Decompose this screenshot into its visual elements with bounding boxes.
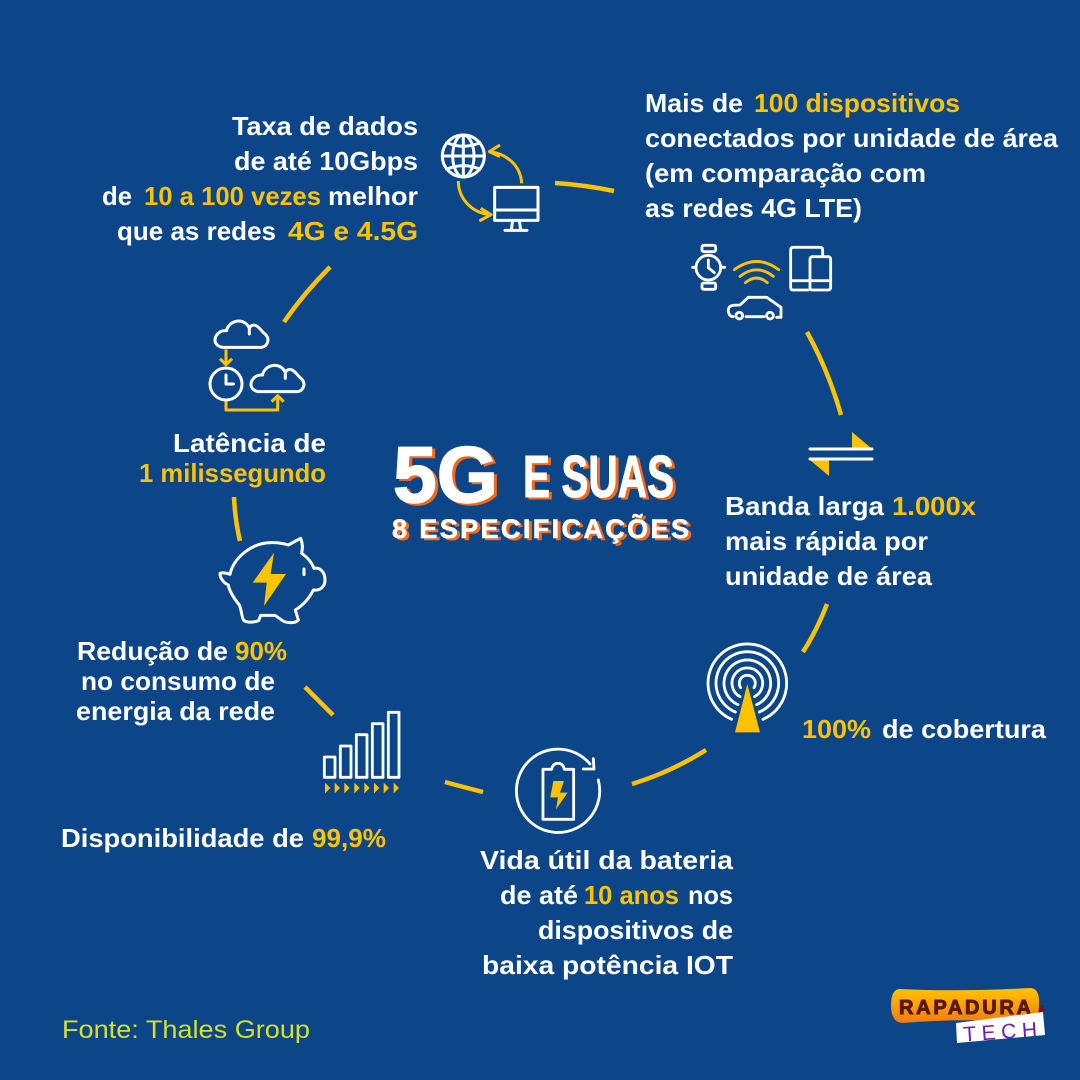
icon: antenna coverage	[708, 644, 787, 732]
icon: battery with refresh ring	[516, 749, 600, 832]
text: redução de 90%: energia da rede	[76, 696, 275, 726]
title: 5G e suas 8 especificações: 8 ESPECIFICAÇÕES	[392, 513, 689, 544]
icon: bandwidth arrows	[810, 432, 872, 476]
connector arc	[284, 267, 330, 322]
title: 5G e suas 8 especificações: E SUAS	[523, 444, 674, 510]
text: vida útil da bateria: de até	[500, 880, 578, 910]
connector arc	[305, 687, 333, 715]
text: mais de 100 dispositivos	[645, 88, 1059, 223]
text: banda larga: 1.000x	[892, 491, 977, 521]
logo: Rapadura Tech: TECH	[962, 1018, 1038, 1047]
text: 100% de cobertura: 100%	[802, 714, 871, 744]
text: disponibilidade: Disponibilidade de	[61, 823, 304, 853]
text: mais de 100 dispositivos: Mais de	[645, 88, 743, 118]
logo: Rapadura Tech: RAPADURA	[899, 997, 1031, 1019]
text: redução de 90%: no consumo de	[81, 666, 275, 696]
text: taxa de dados: Taxa de dados	[232, 111, 418, 141]
text: vida útil da bateria: 10 anos	[584, 880, 679, 910]
text: mais de 100 dispositivos: (em comparação com	[645, 158, 926, 188]
icon: piggy bank with lightning bolt	[220, 538, 325, 623]
text: taxa de dados: de	[102, 181, 132, 211]
connector arc	[632, 750, 706, 784]
text: banda larga: mais rápida por	[725, 526, 928, 556]
connector arc	[803, 604, 827, 652]
text: vida útil da bateria: nos	[688, 880, 733, 910]
connector arc	[555, 183, 614, 191]
text: taxa de dados: de até 10Gbps	[234, 146, 418, 176]
text: banda larga: Banda larga	[725, 491, 885, 521]
text: taxa de dados: melhor	[328, 181, 418, 211]
source note: Fonte: Thales Group	[62, 1016, 310, 1044]
text: disponibilidade: 99,9%	[312, 823, 386, 853]
title: 5G e suas 8 especificações	[392, 430, 689, 544]
text: redução de 90%: Redução de	[77, 636, 228, 666]
text: taxa de dados: 4G e 4.5G	[288, 216, 418, 246]
text: vida útil da bateria: dispositivos de	[538, 915, 733, 945]
text: latência de 1 milissegundo: Latência de	[173, 428, 326, 458]
text: taxa de dados: que as redes	[117, 216, 276, 246]
logo: Rapadura Tech	[891, 988, 1045, 1047]
text: vida útil da bateria	[480, 845, 734, 980]
text: vida útil da bateria: baixa potência IOT	[482, 950, 733, 980]
text: latência de 1 milissegundo: 1 milissegundo	[139, 458, 326, 488]
text: taxa de dados	[102, 111, 418, 246]
text: 100% de cobertura	[802, 714, 1047, 744]
text: latência de 1 milissegundo	[139, 428, 326, 488]
text: redução de 90%	[76, 636, 287, 726]
icon: signal bars	[324, 712, 399, 793]
connector arc	[807, 332, 841, 415]
text: 100% de cobertura: de cobertura	[882, 714, 1047, 744]
connector arc	[445, 782, 483, 792]
text: mais de 100 dispositivos: as redes 4G LTE)	[645, 193, 862, 223]
text: banda larga	[725, 491, 977, 591]
text: taxa de dados: 10 a 100 vezes	[144, 181, 321, 211]
icon: clouds and clock latency	[210, 321, 304, 410]
icon: connected devices	[693, 245, 831, 319]
text: vida útil da bateria: Vida útil da bateria	[480, 845, 734, 875]
text: redução de 90%: 90%	[235, 636, 287, 666]
connector arc	[234, 497, 240, 541]
text: banda larga: unidade de área	[725, 561, 933, 591]
title: 5G e suas 8 especificações: 5G	[393, 430, 498, 519]
text: mais de 100 dispositivos: 100 dispositivos	[754, 88, 960, 118]
text: mais de 100 dispositivos: conectados por unidade de área	[645, 123, 1059, 153]
icon: globe and monitor exchanging data	[442, 135, 538, 230]
